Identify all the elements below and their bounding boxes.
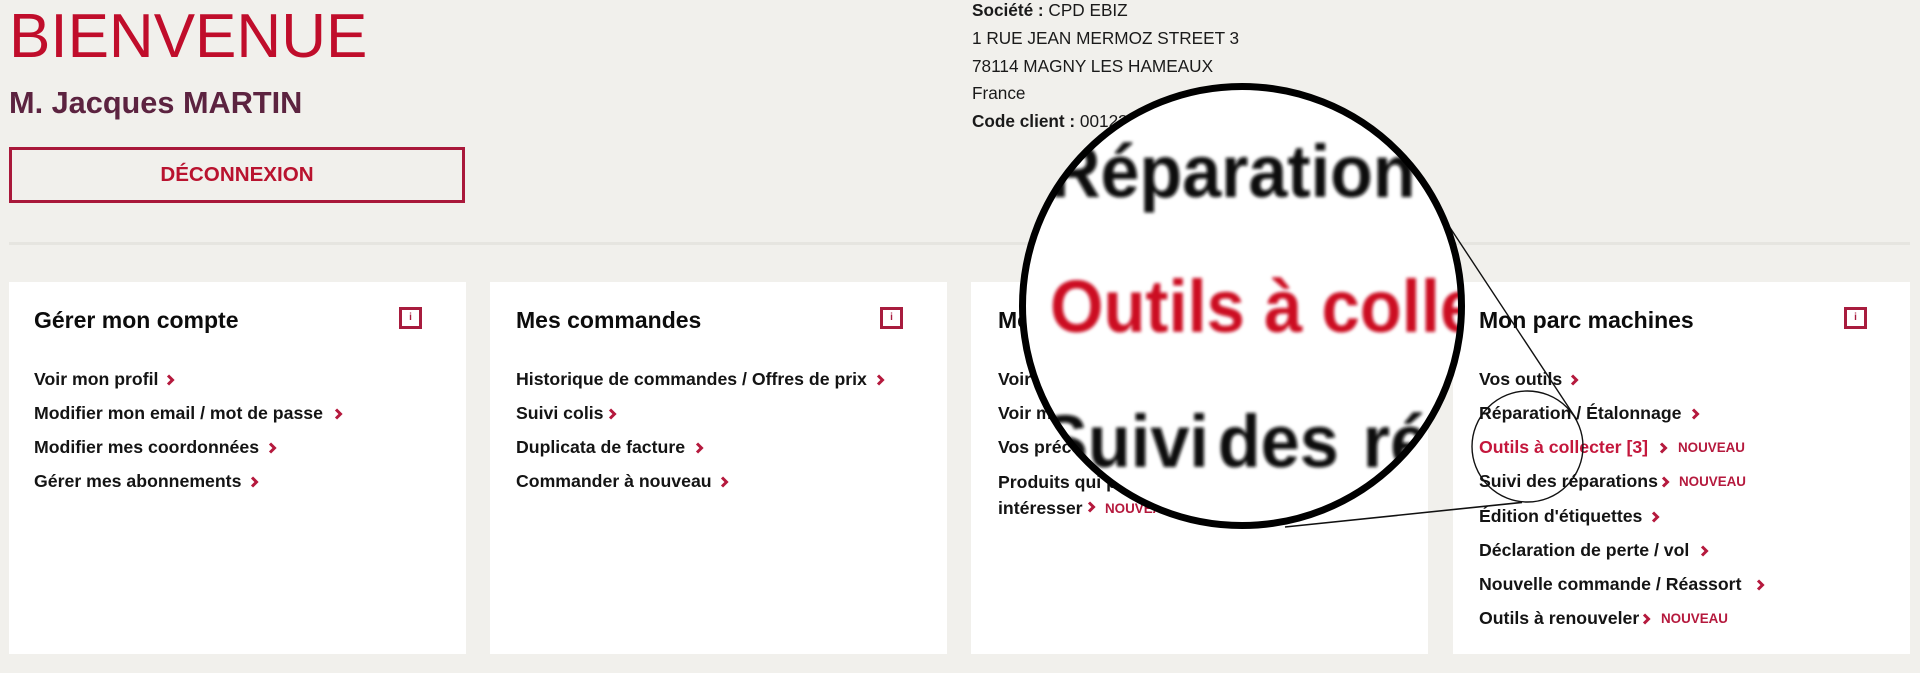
link: Suivi colis: Suivi colis	[516, 403, 604, 423]
magnified text: Suivi	[1041, 401, 1209, 483]
link: Déclaration de perte / vol: Déclaration de perte / vol	[1479, 540, 1689, 560]
link: Produits qui pourraient vous intéresser: intéresser	[998, 498, 1083, 518]
link: Outils à renouveler	[1479, 608, 1728, 628]
link: Nouvelle commande / Réassort: Nouvelle commande / Réassort	[1479, 574, 1741, 594]
link: Édition d'étiquettes: Édition d'étiquettes	[1479, 506, 1642, 526]
company address block: Code client : 0012345	[972, 111, 1147, 131]
link: Vos précédents achats: Vos précédents achats	[998, 437, 1189, 457]
lens rim	[1022, 86, 1462, 526]
link: Modifier mon email: Modifier mon email / mot de passe	[34, 403, 323, 423]
link: Gérer mes abonnements: Gérer mes abonnements	[34, 471, 241, 491]
text: NOUVEAU	[1679, 474, 1746, 489]
text: NOUVEAU	[1678, 440, 1745, 455]
link: Produits qui pourraient vous intéresser: Produits qui pourraient vous	[998, 472, 1240, 492]
link: Voir mon profil: Voir mon profil	[34, 369, 158, 389]
link: Suivi des réparations: Suivi des réparations	[1479, 471, 1658, 491]
panel: Mes commandes	[490, 282, 947, 654]
connector line top	[1445, 220, 1577, 420]
link: Voir mes produits: Voir mes produits	[998, 369, 1147, 389]
text: NOUVEAU	[1661, 611, 1728, 626]
company address block: Société : CPD EBIZ	[972, 0, 1128, 20]
logout button: DÉCONNEXION	[160, 163, 314, 186]
icon: info: i	[409, 312, 412, 323]
link: Outils à renouveler: Outils à renouveler	[1479, 608, 1639, 628]
heading: Gérer mon compte: Gérer mon compte	[34, 307, 238, 333]
company address block: France	[972, 83, 1026, 103]
link: Vos outils: Vos outils	[1479, 369, 1562, 389]
link: Réparation / Étalonnage: Réparation / Étalonnage	[1479, 403, 1681, 423]
logout button	[9, 147, 465, 203]
link: Commander à nouveau: Commander à nouveau	[516, 471, 712, 491]
link: Historique de commandes: Historique de commandes / Offres de prix	[516, 369, 867, 389]
magnified text: Réparation /	[1050, 131, 1454, 213]
magnified text	[1050, 140, 1458, 470]
panel: Mon parc machines	[1453, 282, 1910, 654]
lens disc	[1022, 86, 1462, 526]
magnified text: des	[1218, 401, 1339, 483]
icon: info	[1844, 307, 1867, 329]
link: Voir mes favoris: Voir mes favoris	[998, 403, 1134, 423]
icon: info	[399, 307, 422, 329]
heading: third column: Mes produits	[998, 307, 1141, 333]
magnified text: réparations	[1363, 401, 1745, 483]
heading: Mon parc machines: Mon parc machines	[1479, 307, 1694, 333]
connector line bottom	[1285, 502, 1522, 527]
panel: third column	[971, 282, 1428, 654]
link: Suivi des réparations	[1479, 471, 1746, 491]
magnified text: Outils à collecter	[1050, 266, 1604, 349]
user name: M. Jacques MARTIN	[9, 85, 302, 120]
heading: Mes commandes: Mes commandes	[516, 307, 701, 333]
link: Produits qui pourraient vous intéresser	[998, 472, 1240, 518]
icon: info: i	[1854, 312, 1857, 323]
company address block	[972, 0, 1239, 131]
magnifier overlay	[1019, 83, 1584, 529]
title: BIENVENUE	[9, 2, 367, 71]
company address block: 1 RUE JEAN MERMOZ STREET 3	[972, 28, 1239, 48]
link: Produits qui pourraient vous intéresser: NOUVEAU	[1105, 501, 1172, 516]
icon: info: i	[890, 312, 893, 323]
small source circle	[1472, 391, 1583, 502]
link: Modifier mes coordonnées: Modifier mes coordonnées	[34, 437, 259, 457]
link: Outils à collecter: Outils à collecter [3]	[1479, 437, 1648, 457]
company address block: 78114 MAGNY LES HAMEAUX	[972, 56, 1213, 76]
link: Outils à collecter	[1479, 437, 1745, 457]
link: Duplicata de facture: Duplicata de facture	[516, 437, 685, 457]
icon: info	[880, 307, 903, 329]
panel: Gérer mon compte	[9, 282, 466, 654]
